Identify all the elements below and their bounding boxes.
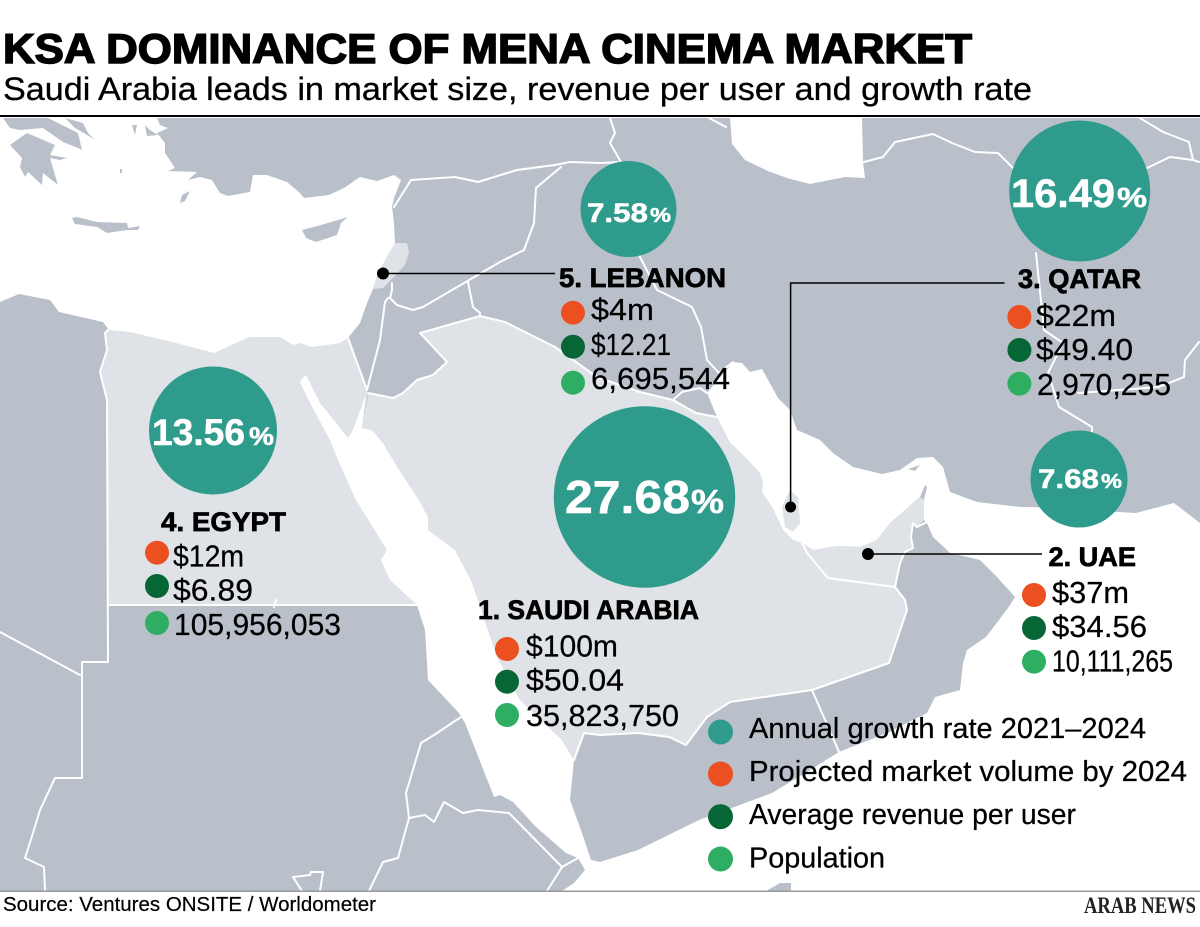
growth bubble: Egypt: % [249, 423, 274, 451]
panel: Lebanon [559, 161, 730, 396]
growth bubble: Lebanon: 7.58 [587, 198, 648, 228]
panel: Qatar [1007, 120, 1171, 402]
growth bubble: Lebanon [580, 161, 676, 257]
country name: Lebanon: 5. LEBANON [559, 263, 726, 293]
growth bubble: UAE: % [1101, 471, 1122, 493]
source: Source: Ventures ONSITE / Worldometer [3, 894, 376, 916]
country name: UAE: 2. UAE [1048, 542, 1136, 572]
growth bubble: Saudi Arabia: % [691, 483, 724, 520]
growth bubble: Saudi Arabia: 27.68 [565, 471, 690, 523]
country name: Saudi Arabia: 1. SAUDI ARABIA [478, 595, 699, 625]
stats: Lebanon: $12.21 [591, 327, 671, 362]
legend item: population: Population [749, 843, 885, 875]
country name: Egypt: 4. EGYPT [161, 507, 287, 537]
stats: Saudi Arabia: 35,823,750 [526, 698, 679, 733]
stats: Qatar: 2,970,255 [1037, 367, 1171, 402]
stats: UAE [1022, 575, 1173, 679]
growth bubble: Egypt [149, 366, 277, 494]
country name: Qatar: 3. QATAR [1018, 264, 1141, 294]
growth bubble: Egypt: 13.56 [152, 412, 245, 453]
stats: Qatar: $49.40 [1036, 332, 1133, 367]
stats: UAE: $37m [1052, 575, 1129, 610]
stats: Saudi Arabia: $100m [526, 629, 618, 664]
growth bubble: Saudi Arabia [554, 406, 735, 588]
growth bubble: Lebanon: % [650, 205, 671, 227]
title: KSA DOMINANCE OF MENA CINEMA MARKET [3, 25, 972, 72]
legend item: projected market volume: Projected market volume by 2024 [749, 756, 1187, 788]
stats: Saudi Arabia [495, 629, 679, 733]
growth bubble: Qatar: 16.49 [1011, 172, 1115, 216]
legend item: average revenue per user: Average revenue per user [749, 799, 1076, 831]
leader line: UAE [862, 548, 1042, 560]
stats: Qatar [1007, 298, 1171, 402]
stats: Lebanon: $4m [591, 292, 654, 327]
stats: Qatar: $22m [1036, 298, 1116, 333]
growth bubble: UAE: 7.68 [1038, 464, 1099, 494]
stats: Saudi Arabia: $50.04 [526, 663, 624, 698]
growth bubble: UAE [1030, 430, 1128, 528]
stats: Egypt: 105,956,053 [174, 607, 341, 642]
stats: Lebanon: 6,695,544 [591, 361, 730, 396]
stats: UAE: 10,111,265 [1052, 644, 1173, 679]
stats: Egypt [145, 539, 341, 642]
growth bubble: Qatar: % [1117, 182, 1147, 213]
stats: Egypt: $6.89 [173, 573, 253, 608]
stats: UAE: $34.56 [1052, 609, 1147, 644]
legend item: annual growth rate: Annual growth rate 2021–2024 [749, 713, 1146, 745]
leader line: Qatar [785, 283, 1004, 512]
subtitle: Saudi Arabia leads in market size, revenue per user and growth rate [3, 71, 1032, 107]
growth bubble: Qatar [1009, 120, 1150, 262]
panel: Egypt [145, 366, 341, 642]
panel: Saudi Arabia [478, 406, 735, 733]
stats: Egypt: $12m [173, 539, 244, 574]
stats: Lebanon [561, 292, 730, 396]
panel: UAE [1022, 430, 1173, 679]
leader line: Lebanon [377, 268, 555, 280]
legend [708, 713, 1187, 875]
